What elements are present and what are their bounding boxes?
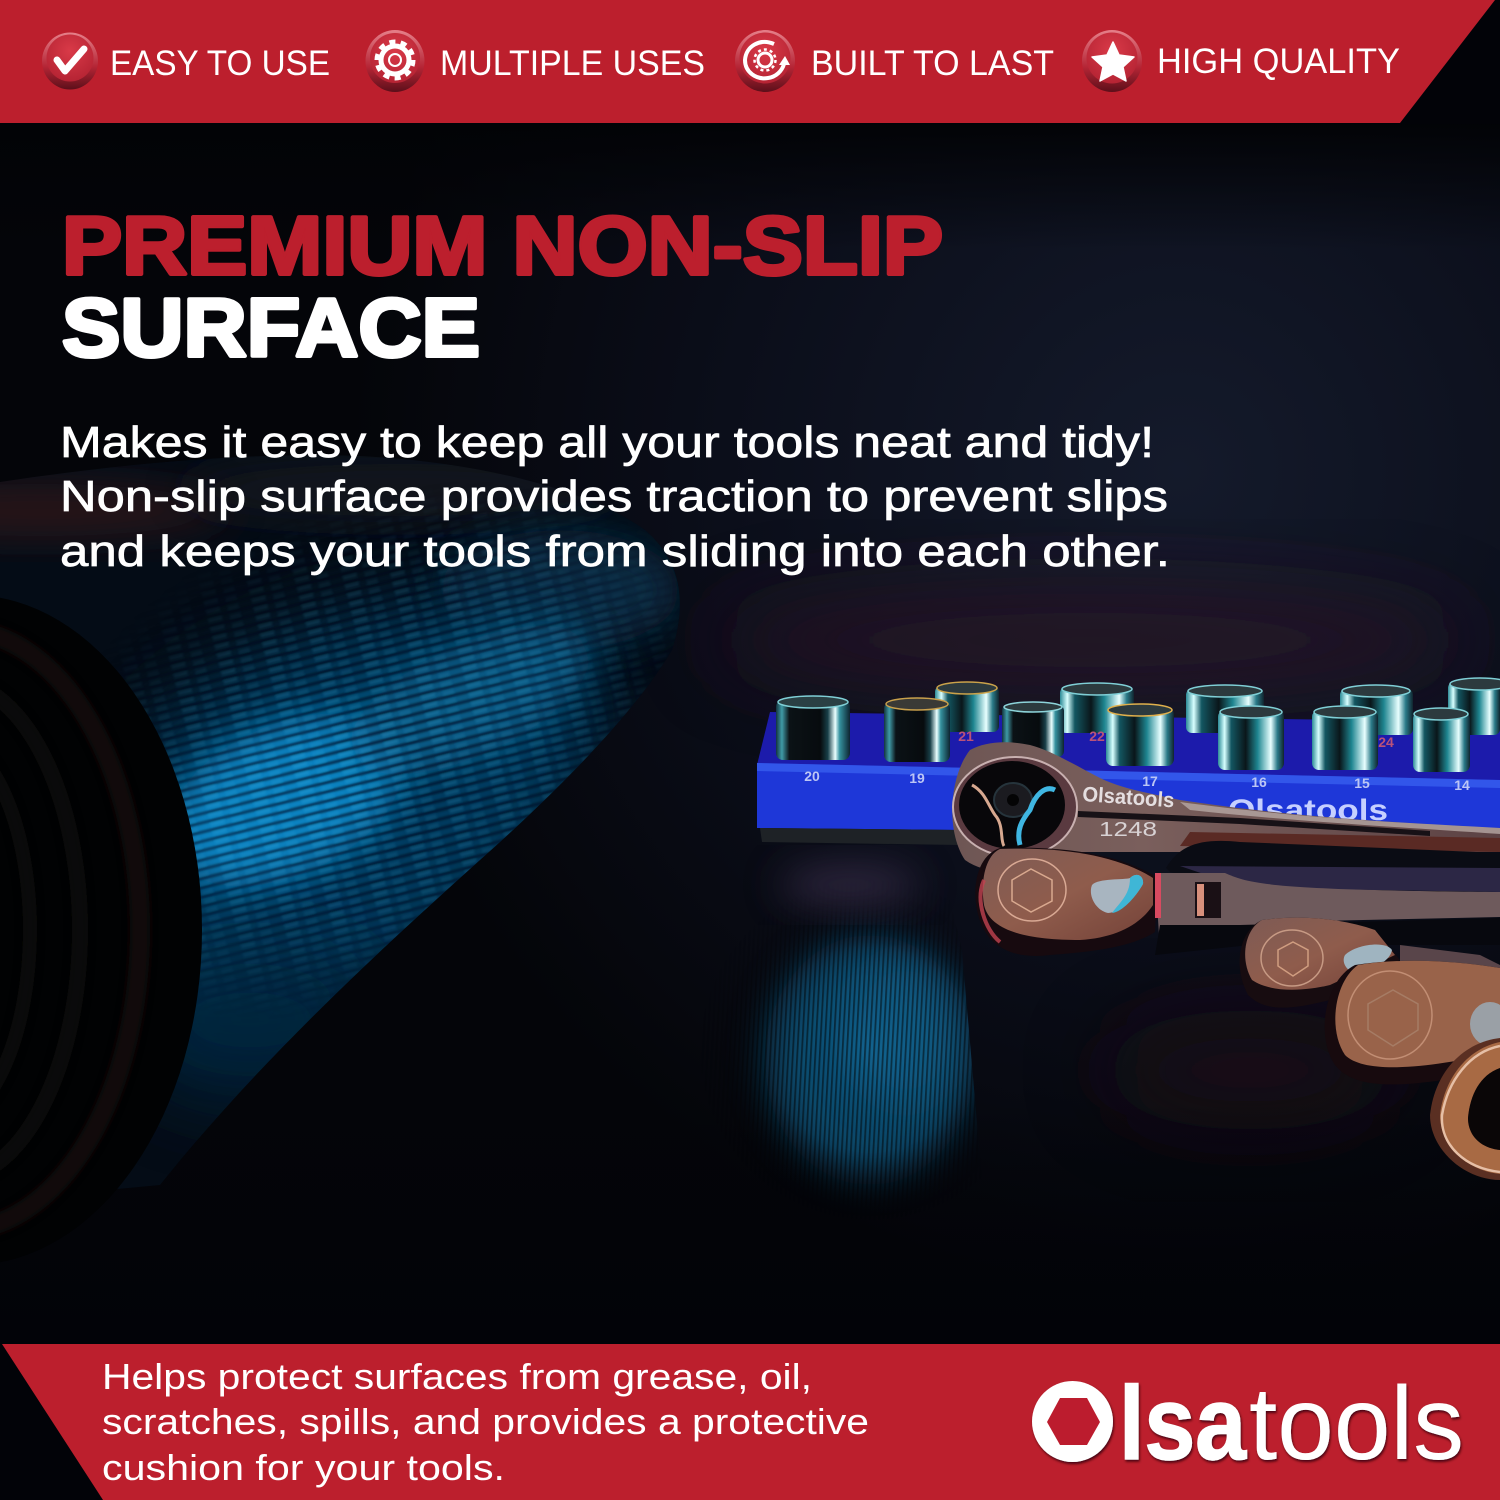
top red banner [0,0,1495,123]
tray size numbers: 15 [1354,775,1370,791]
main heading [62,199,943,374]
mat roll end with spiral rings [0,595,202,1265]
tray size numbers: 14 [1454,777,1470,793]
Olsatools logo: tools [1249,1366,1464,1482]
front row sockets [776,696,1470,772]
icon: star [1082,30,1142,92]
tray size numbers [804,728,1470,793]
tray size numbers: 17 [1142,773,1158,789]
label: high quality: HIGH QUALITY [1157,42,1400,81]
label: multiple uses: MULTIPLE USES [440,44,705,83]
tray size numbers: 22 [1089,728,1105,744]
dim glow on mat near wrench [780,865,920,905]
Olsatools logo: lsa [1119,1366,1247,1482]
wrench 4 head [1325,961,1500,1084]
socket organizer tray [757,678,1500,845]
bottom red banner [2,1344,1500,1500]
wrench 2 handle [1155,873,1500,955]
back row sockets [935,678,1500,735]
main heading: PREMIUM NON-SLIP [62,199,943,292]
description text: and keeps your tools from sliding into each other. [60,527,1170,576]
rolled non-slip mat [0,455,680,1230]
footer note [102,1356,869,1488]
wrench model number: 1248 [1099,819,1157,841]
Olsatools logo: O [1033,1366,1113,1482]
tray size numbers: 20 [804,768,820,784]
wrench 5 ring head [1430,1038,1500,1180]
icon: gear [366,30,424,92]
footer note: Helps protect surfaces from grease, oil, [102,1356,812,1397]
wrench 3 neck [1400,945,1500,975]
footer note: scratches, spills, and provides a protective [102,1401,869,1442]
textured mat surface lit blue [746,920,977,1196]
wrench brand text: Olsatools [1082,783,1175,812]
floor seen through handles [1180,866,1500,892]
tray brand text: Olsatools [1228,794,1388,827]
wrench 3 head [1240,918,1400,1008]
label: built to last: BUILT TO LAST [811,44,1054,83]
tray size numbers: 24 [1378,734,1394,750]
footer note: cushion for your tools. [102,1447,505,1488]
icon: check mark [42,32,98,90]
tray size numbers: 21 [958,728,974,744]
tray size numbers: 16 [1251,774,1267,790]
wrench 1 with engraving [952,742,1500,871]
ratchet head [953,757,1077,857]
description text [60,418,1170,576]
chrome ratchet wrench set [952,742,1500,1180]
main heading: SURFACE [62,281,480,374]
description text: Makes it easy to keep all your tools neat and tidy! [60,418,1154,467]
wrench 2 head [975,848,1161,956]
tray size numbers: 19 [909,770,925,786]
icon: cycle arrow [735,30,795,92]
description text: Non-slip surface provides traction to prevent slips [60,472,1168,521]
Olsatools logo [1032,1366,1464,1482]
gap between handles [1166,841,1500,893]
label: easy to use: EASY TO USE [110,44,330,83]
